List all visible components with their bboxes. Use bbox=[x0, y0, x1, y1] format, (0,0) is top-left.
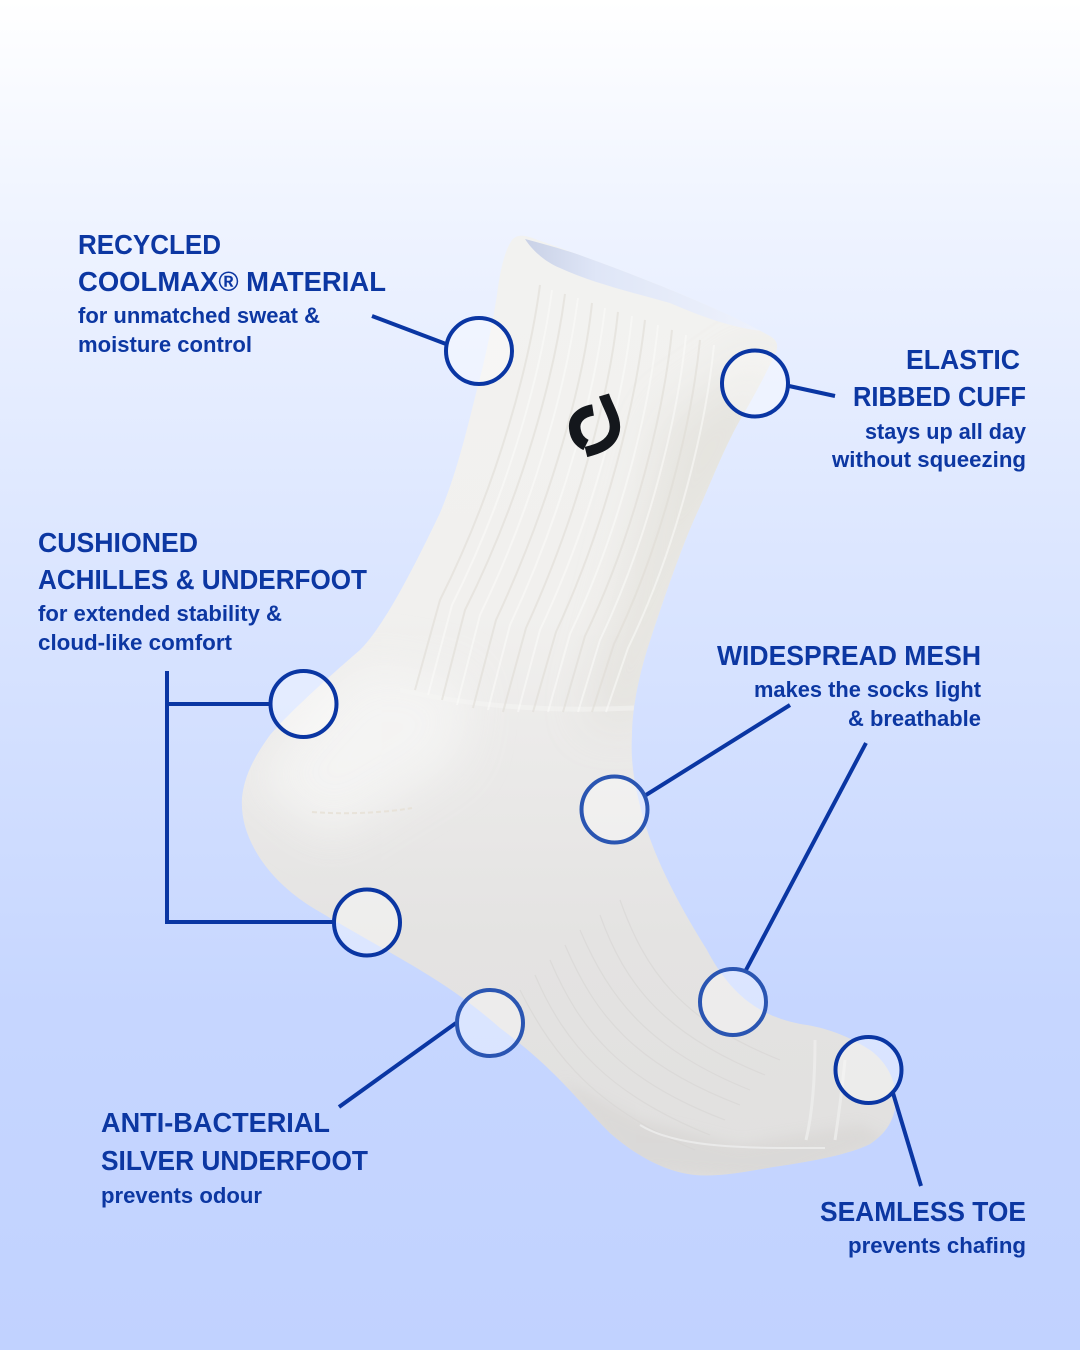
callout: anti-bacterial silver underfoot bbox=[101, 990, 523, 1208]
heading bbox=[101, 1107, 368, 1176]
bracket leader line bbox=[167, 671, 333, 922]
heading: SILVER UNDERFOOT bbox=[101, 1145, 368, 1176]
sock illustration bbox=[242, 236, 896, 1180]
description: without squeezing bbox=[831, 447, 1026, 472]
heading: ACHILLES & UNDERFOOT bbox=[38, 564, 367, 595]
description: cloud-like comfort bbox=[38, 630, 233, 655]
callout: recycled coolmax material bbox=[78, 229, 512, 384]
ribbing bbox=[415, 285, 714, 712]
ankle band bbox=[618, 706, 630, 708]
leader line: lower bbox=[746, 743, 866, 970]
description: makes the socks light bbox=[754, 677, 982, 702]
heading bbox=[78, 229, 386, 297]
heading: ANTI-BACTERIAL bbox=[101, 1107, 330, 1138]
leader line: upper bbox=[646, 705, 790, 795]
heading: SEAMLESS TOE bbox=[820, 1196, 1026, 1227]
description: & breathable bbox=[848, 706, 981, 731]
heading: WIDESPREAD MESH bbox=[717, 640, 981, 671]
leader line bbox=[372, 316, 446, 344]
description: moisture control bbox=[78, 332, 252, 357]
marker circle: achilles bbox=[270, 671, 336, 737]
heading: COOLMAX® MATERIAL bbox=[78, 266, 386, 297]
marker circle bbox=[446, 318, 512, 384]
icon: embroidered logo bbox=[575, 395, 615, 452]
description bbox=[38, 601, 282, 655]
description bbox=[831, 419, 1027, 472]
description: stays up all day bbox=[865, 419, 1027, 444]
heading: RIBBED CUFF bbox=[853, 381, 1026, 412]
description: prevents chafing bbox=[848, 1233, 1026, 1258]
leader line bbox=[789, 386, 835, 396]
heel seam bbox=[312, 808, 412, 813]
cuff opening bbox=[525, 239, 764, 331]
heading bbox=[38, 527, 367, 595]
heading bbox=[853, 344, 1026, 412]
callout: seamless toe bbox=[820, 1037, 1026, 1258]
shading bbox=[605, 382, 750, 706]
callout: cushioned achilles and underfoot bbox=[38, 527, 400, 956]
foot knit bbox=[520, 900, 845, 1150]
heading: ELASTIC bbox=[906, 344, 1020, 375]
description bbox=[78, 303, 320, 357]
callout: elastic ribbed cuff bbox=[722, 344, 1027, 472]
leader line bbox=[339, 1023, 456, 1107]
heading: CUSHIONED bbox=[38, 527, 198, 558]
marker circle: instep bbox=[700, 969, 766, 1035]
description bbox=[754, 677, 982, 731]
description: for unmatched sweat & bbox=[78, 303, 320, 328]
marker circle bbox=[722, 350, 788, 416]
marker circle: underfoot bbox=[334, 890, 400, 956]
leader line bbox=[893, 1093, 921, 1186]
description: prevents odour bbox=[101, 1183, 262, 1208]
heading: RECYCLED bbox=[78, 229, 221, 260]
marker circle bbox=[836, 1037, 902, 1103]
callout: widespread mesh bbox=[582, 640, 982, 1035]
marker circle bbox=[457, 990, 523, 1056]
marker circle: ankle bbox=[582, 776, 648, 842]
description: for extended stability & bbox=[38, 601, 282, 626]
